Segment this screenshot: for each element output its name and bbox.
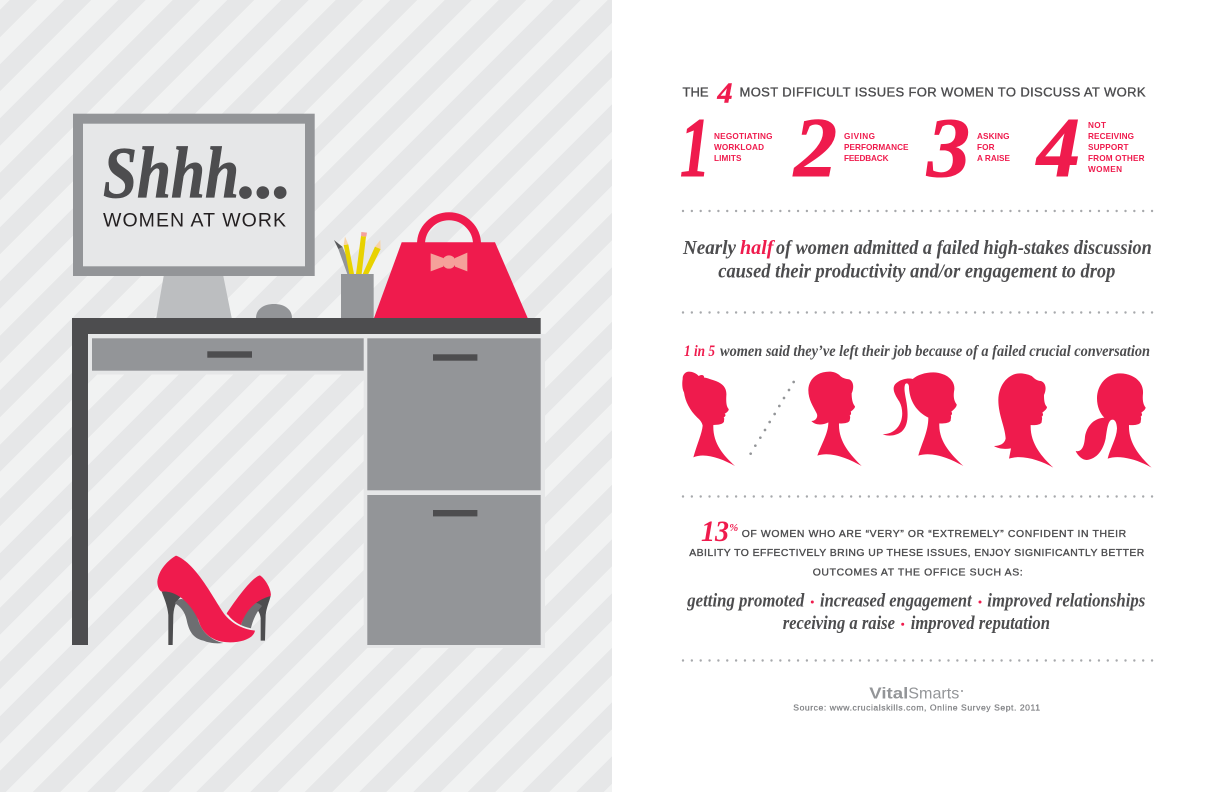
- issue 4: not receiving support from other women: SUPPORT: [1088, 143, 1128, 152]
- text block: nearly half of women: Nearly: [682, 237, 736, 259]
- middle cabinet drawer: [367, 338, 541, 490]
- issue 2: giving performance feedback: [792, 101, 909, 195]
- desk with drawers: [72, 318, 545, 648]
- stat: 13 percent confident: %: [729, 522, 738, 534]
- logo: VitalSmarts: [869, 685, 963, 702]
- logo: VitalSmarts: Smarts: [908, 685, 959, 702]
- issue 4: not receiving support from other women: [1035, 101, 1145, 195]
- issue 3: asking for a raise: ASKING: [977, 132, 1010, 141]
- list: better outcomes: improved relationships: [987, 591, 1145, 612]
- stat: 13 percent confident: ABILITY TO EFFECTIVELY BRING UP THESE ISSUES, ENJOY SIGNIFICANTLY BETTER: [689, 548, 1145, 559]
- heading: the 4 most difficult issues: MOST DIFFICULT ISSUES FOR WOMEN TO DISCUSS AT WORK: [740, 85, 1146, 100]
- list: better outcomes: getting promoted: [686, 591, 805, 612]
- top-left drawer: [92, 338, 364, 371]
- list: better outcomes: receiving a raise: [783, 613, 895, 634]
- title: Shhh...: ...: [239, 133, 292, 214]
- text block: 1 in 5 women: women said they’ve left their job because of a failed crucial conversation: [720, 343, 1150, 360]
- source line: Source: www.crucialskills.com, Online Survey Sept. 2011: [793, 703, 1040, 713]
- stat: 13 percent confident: OF WOMEN WHO ARE “VERY” OR “EXTREMELY” CONFIDENT IN THEIR: [742, 529, 1127, 540]
- text block: nearly half of women: caused their productivity and/or engagement to drop: [718, 260, 1115, 282]
- issue 1: negotiating workload limits: [680, 101, 772, 195]
- silhouette: short flip: [808, 372, 862, 466]
- issue 4: not receiving support from other women: RECEIVING: [1088, 132, 1134, 141]
- heading: the 4 most difficult issues: THE: [682, 85, 709, 100]
- list: better outcomes: [686, 591, 1145, 634]
- icon row: five women silhouettes: [682, 372, 1152, 468]
- issue 2: giving performance feedback: FEEDBACK: [844, 154, 889, 163]
- silhouette: ponytail: [883, 372, 963, 466]
- text block: nearly half of women: [682, 237, 1152, 282]
- heading: the 4 most difficult issues: [682, 78, 1146, 110]
- issue 2: giving performance feedback: GIVING: [844, 132, 875, 141]
- lower cabinet drawer: [367, 495, 541, 645]
- issue 4: not receiving support from other women: WOMEN: [1088, 165, 1122, 174]
- issue 2: giving performance feedback: PERFORMANCE: [844, 143, 909, 152]
- subtitle: women at work: WOMEN AT WORK: [103, 210, 286, 232]
- icon: red handbag with bow: [374, 216, 528, 318]
- panel: statistics column: [612, 0, 1224, 792]
- issue 1: negotiating workload limits: 1: [680, 101, 710, 195]
- issue 1: negotiating workload limits: LIMITS: [714, 154, 742, 163]
- issue 4: not receiving support from other women: FROM OTHER: [1088, 154, 1145, 163]
- issue 3: asking for a raise: A RAISE: [977, 154, 1011, 163]
- silhouette: hair bun: [682, 372, 735, 466]
- silhouette: low pigtail: [1076, 373, 1152, 468]
- computer monitor: [73, 114, 315, 318]
- text block: 1 in 5 women: 1 in 5: [684, 343, 715, 360]
- icon: computer mouse: [256, 304, 292, 318]
- silhouette: long hair: [994, 373, 1053, 468]
- logo: VitalSmarts: Vital: [869, 685, 908, 702]
- list: better outcomes: increased engagement: [820, 591, 972, 612]
- issue 3: asking for a raise: [926, 101, 1011, 195]
- stat: 13 percent confident: 13: [701, 515, 729, 548]
- issue 1: negotiating workload limits: NEGOTIATING: [714, 132, 772, 141]
- issue 1: negotiating workload limits: WORKLOAD: [714, 143, 764, 152]
- issue 3: asking for a raise: FOR: [977, 143, 995, 152]
- list: better outcomes: improved reputation: [911, 613, 1050, 634]
- heading: the 4 most difficult issues: 4: [716, 78, 732, 110]
- issue 4: not receiving support from other women: NOT: [1088, 121, 1106, 130]
- text block: nearly half of women: half: [740, 237, 776, 259]
- text block: nearly half of women: of women admitted a failed high-stakes discussion: [776, 237, 1152, 259]
- icon: pencil cup: [334, 232, 381, 318]
- title: Shhh...: Shhh: [103, 133, 239, 214]
- issue 2: giving performance feedback: 2: [792, 101, 837, 195]
- dotted slash: [749, 381, 795, 455]
- stat: 13 percent confident: OUTCOMES AT THE OFFICE SUCH AS:: [813, 568, 1023, 579]
- issue 4: not receiving support from other women: 4: [1035, 101, 1080, 195]
- panel: striped illustration background: [0, 0, 612, 792]
- issue 3: asking for a raise: 3: [926, 101, 970, 195]
- stat: 13 percent confident: [689, 515, 1145, 579]
- icon: red high heels: [157, 556, 271, 645]
